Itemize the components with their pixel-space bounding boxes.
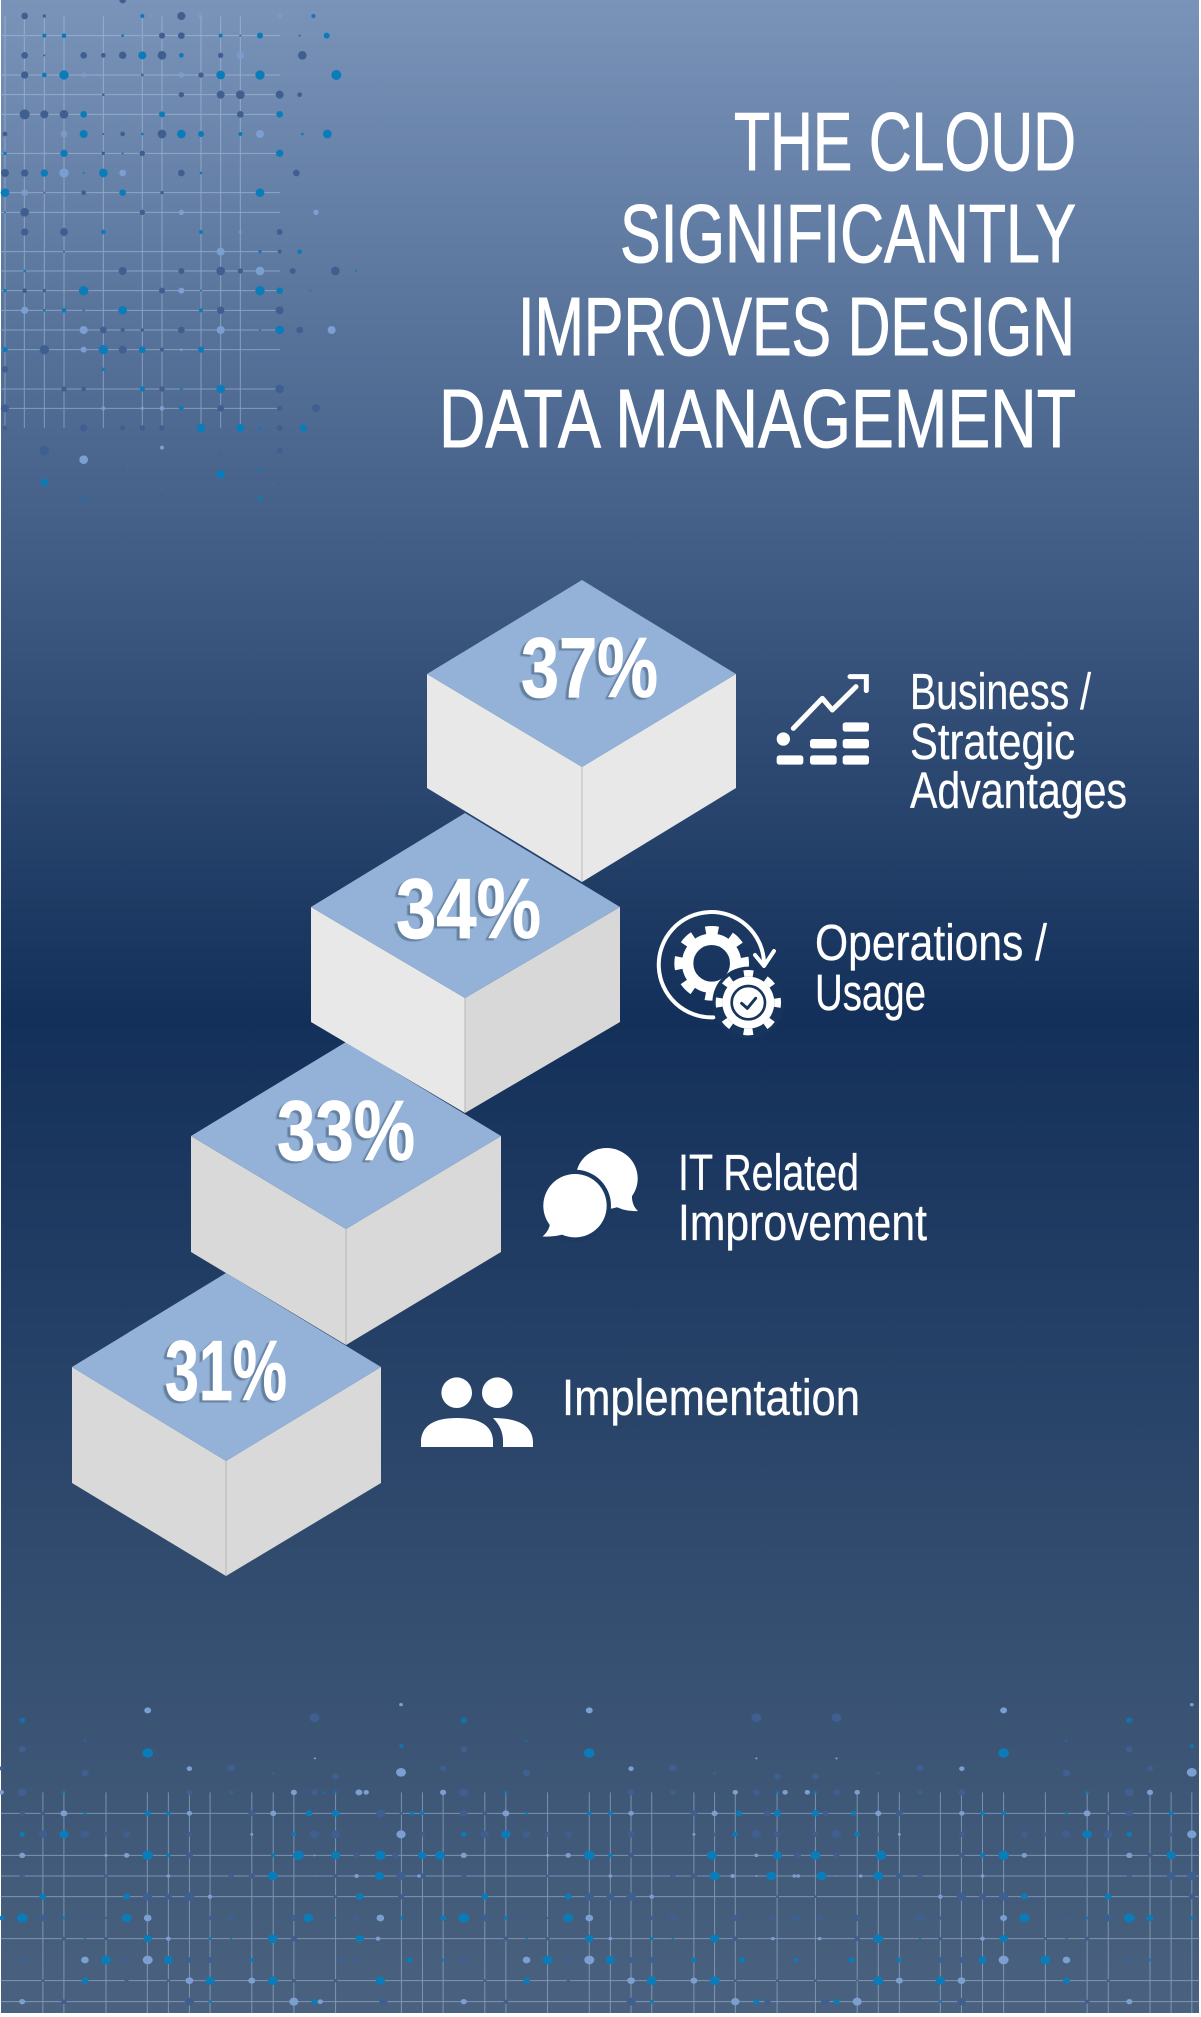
icon: speech bubbles [539,1148,638,1242]
cube: 34% Operations / Usage: 34% [396,862,541,957]
cube: 37% Business / Strategic Advantages [427,580,736,882]
label: Business / Strategic Advantages: Strategic [910,713,1075,770]
label: IT Related Improvement: Improvement [678,1194,927,1251]
title [439,95,1076,465]
label: Operations / Usage: Usage [815,964,926,1021]
cube: 37% Business / Strategic Advantages: 37% [521,621,658,716]
cube: 31% Implementation: 31% [165,1324,287,1419]
icon: gears with check [659,912,784,1039]
label: Business / Strategic Advantages [910,663,1127,819]
dot grid: top left [0,0,357,502]
cube: 34% Operations / Usage [311,813,620,1113]
dot grid: bottom left [0,1703,600,2013]
icon: growth chart [777,677,869,765]
label: IT Related Improvement [678,1144,927,1251]
title: THE CLOUD [734,95,1076,188]
dot grid: bottom right [600,1703,1200,2013]
label: Operations / Usage: Operations / [815,914,1048,971]
icon: two people [421,1377,533,1447]
cube: 31% Implementation [72,1273,381,1576]
label: Business / Strategic Advantages: Business / [910,663,1092,720]
cube: 33% IT Related Improvement: 33% [277,1084,415,1179]
label: Implementation: Implementation [562,1369,860,1426]
label: Operations / Usage [815,914,1048,1021]
label: Business / Strategic Advantages: Advantages [910,762,1127,819]
label: IT Related Improvement: IT Related [678,1144,859,1201]
cube: 33% IT Related Improvement [191,1042,501,1345]
